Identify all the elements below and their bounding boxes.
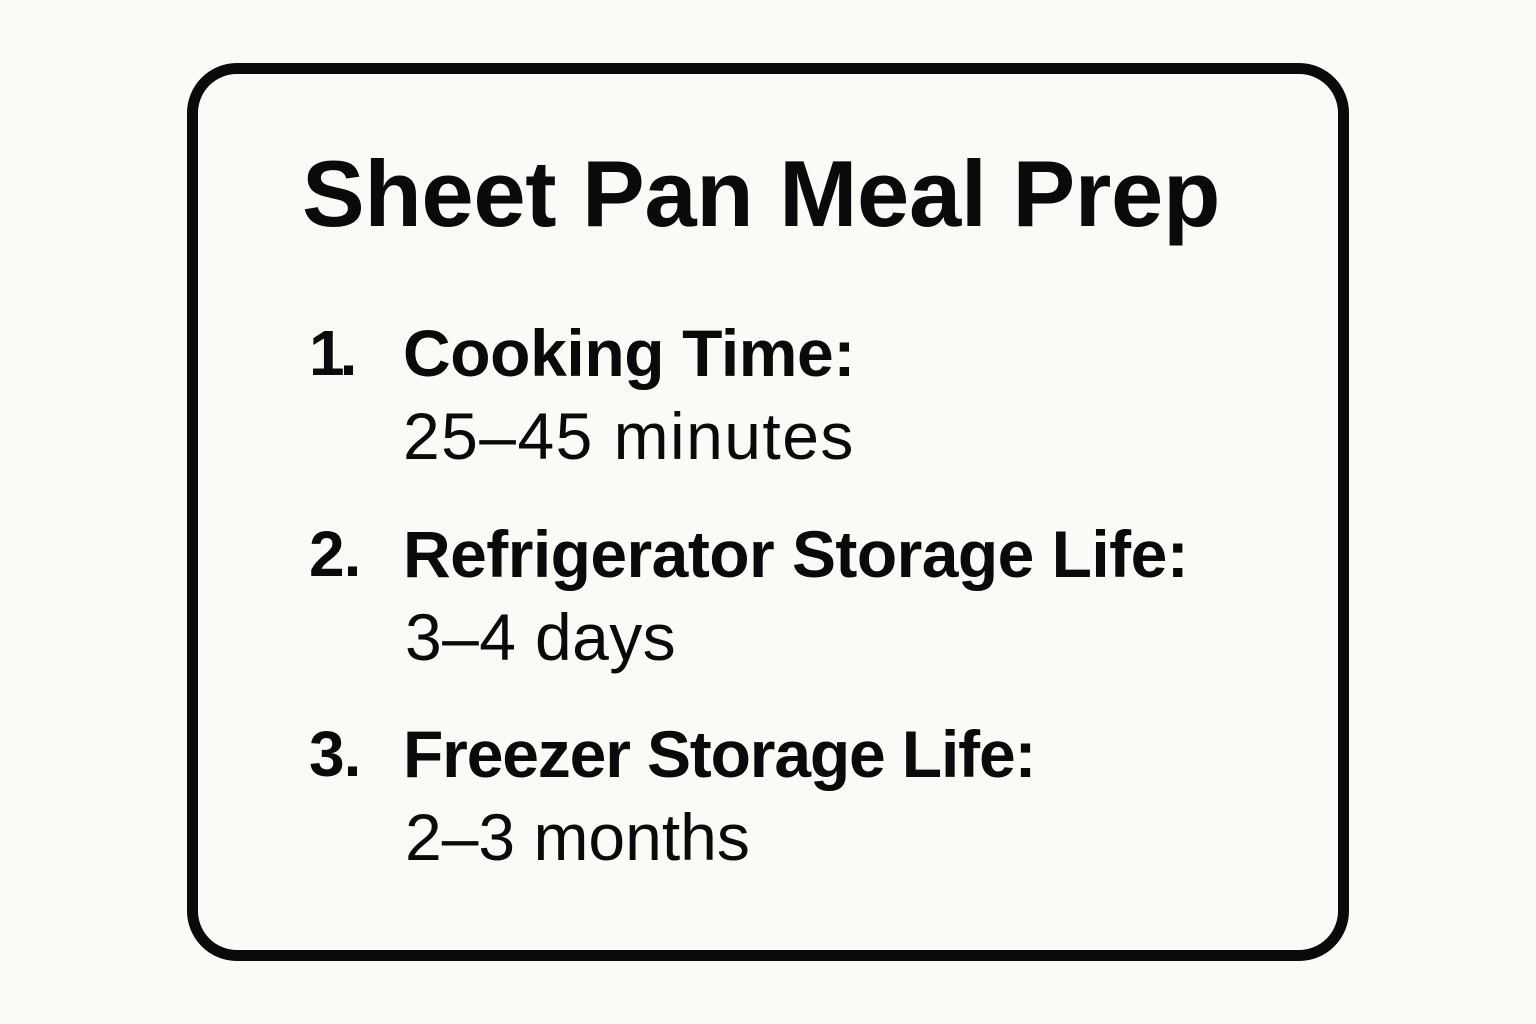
title: Sheet Pan Meal Prep [302,141,1220,246]
number 1: 1. [309,317,352,389]
value: cooking time: 25–45 minutes [403,399,855,473]
list item 1 [309,316,855,473]
heading: cooking time: Cooking Time: [403,316,855,390]
panel: card frame [187,63,1349,961]
number 2: 2. [309,518,360,590]
value: freezer storage life: 2–3 months [405,800,750,874]
heading: refrigerator storage life: Refrigerator Storage Life: [403,517,1188,591]
value: refrigerator storage life: 3–4 days [405,600,676,674]
heading: freezer storage life: Freezer Storage Life: [403,717,1035,791]
list item 2 [309,517,1188,674]
list item 3 [309,717,1035,874]
number 3: 3. [309,718,360,790]
